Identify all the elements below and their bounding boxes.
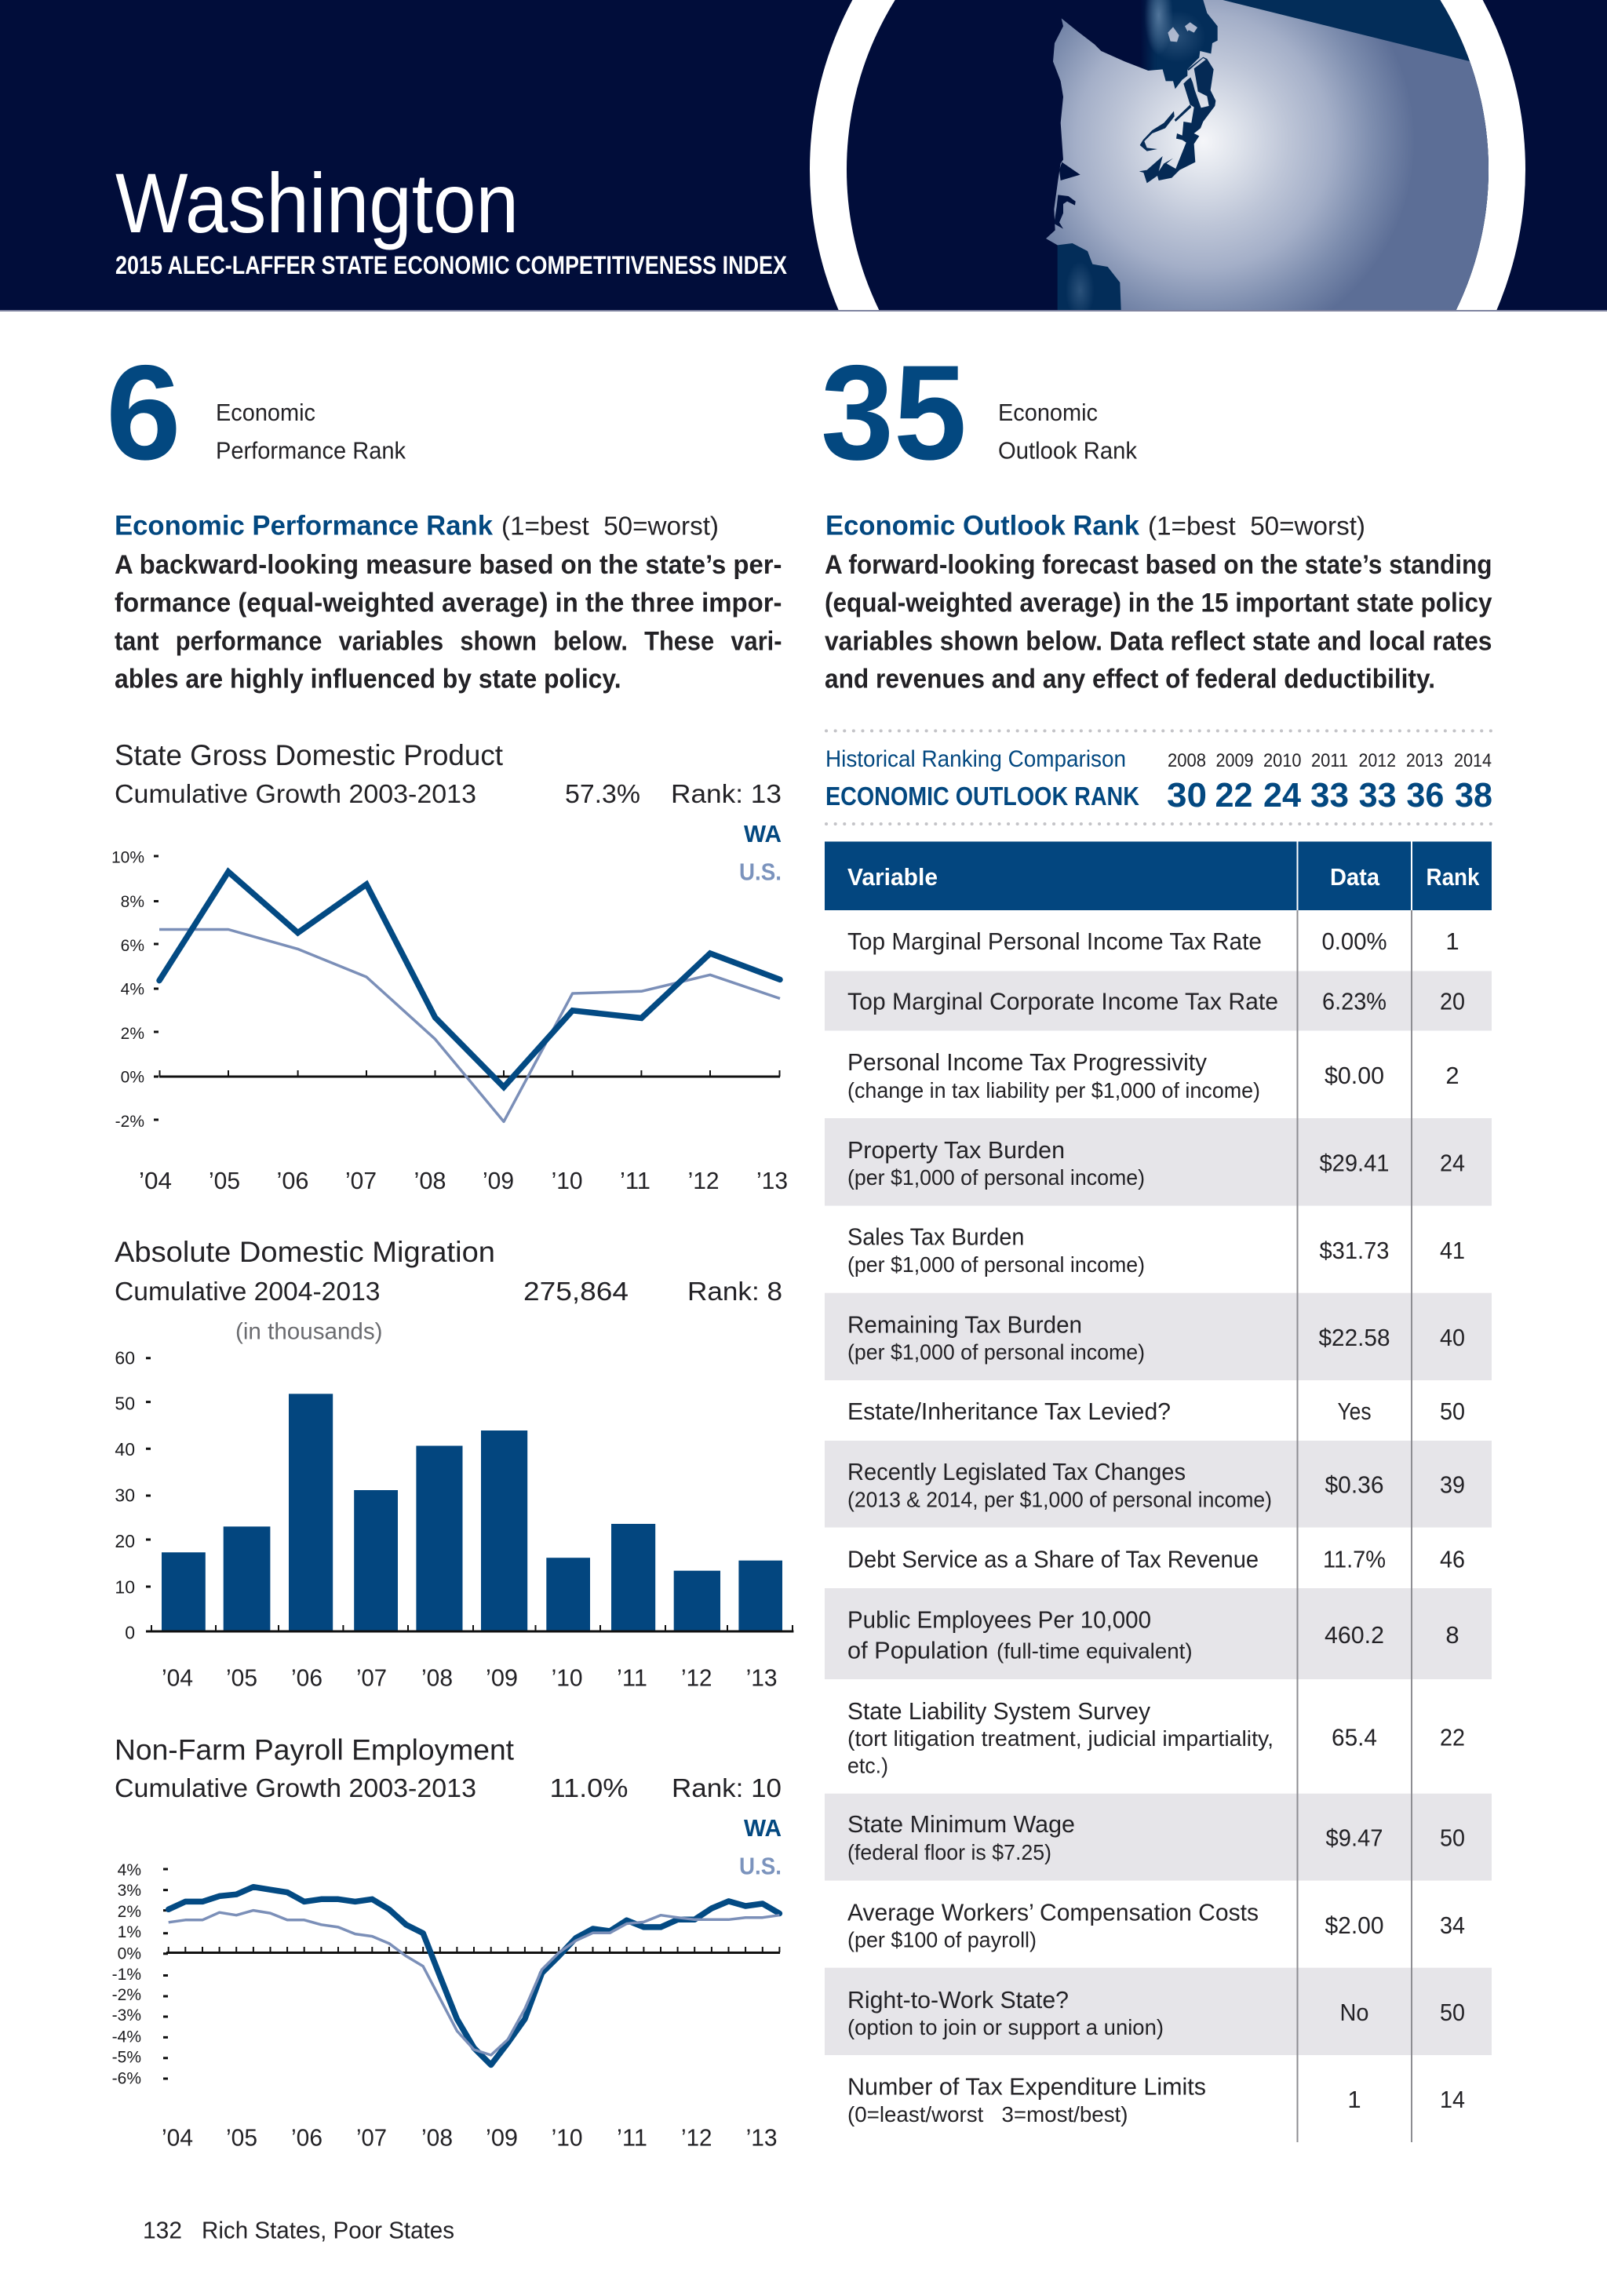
y axis labels: -3% <box>112 2006 141 2024</box>
outlook description: (equal-weighted average) in the 15 important state policy <box>825 588 1492 618</box>
years: 2008 <box>1168 750 1206 771</box>
years: 2014 <box>1454 750 1492 771</box>
y axis labels: 0% <box>118 1944 141 1963</box>
row: sales tax burden <box>825 1206 1492 1293</box>
footer page number: 132 <box>143 2217 182 2244</box>
performance description: tant performance variables shown below. These vari- <box>115 626 782 656</box>
outlook heading: Economic Outlook Rank <box>825 511 1140 541</box>
x axis labels: ’04 <box>162 1664 193 1692</box>
row: top marginal personal income tax rate <box>825 910 1492 971</box>
row: top marginal corporate income tax rate: 6.23% <box>1322 988 1387 1015</box>
row: remaining tax burden: 40 <box>1440 1324 1465 1351</box>
title: Washington <box>115 155 519 250</box>
row: workers compensation <box>825 1881 1492 1968</box>
rank caption: Outlook Rank <box>998 437 1137 465</box>
historical ranks <box>1167 776 1492 815</box>
row: personal income tax progressivity <box>825 1031 1492 1118</box>
row: remaining tax burden: $22.58 <box>1318 1324 1390 1351</box>
row: top marginal personal income tax rate: 0.00% <box>1321 928 1387 955</box>
y axis labels <box>111 849 144 1131</box>
x axis labels <box>139 1167 788 1194</box>
x axis labels <box>162 1664 778 1692</box>
row: recently legislated tax changes: $0.36 <box>1325 1471 1384 1499</box>
outlook heading <box>825 511 1365 541</box>
y axis labels: 40 <box>115 1439 135 1460</box>
row: property tax burden: Property Tax Burden <box>847 1136 1065 1164</box>
row: state minimum wage: State Minimum Wage <box>847 1810 1075 1838</box>
y axis labels: 1% <box>118 1923 141 1941</box>
row: property tax burden: 24 <box>1440 1150 1465 1177</box>
y axis labels: 50 <box>115 1394 135 1414</box>
panel: economic outlook rank <box>821 337 1492 694</box>
row: tax expenditure limits: (0=least/worst 3=most/best) <box>847 2102 1128 2127</box>
row: right-to-work: Right-to-Work State? <box>847 1986 1069 2014</box>
y axis labels <box>115 1347 135 1643</box>
row: personal income tax progressivity: (change in tax liability per $1,000 of income) <box>847 1078 1260 1102</box>
row: top marginal personal income tax rate: Top Marginal Personal Income Tax Rate <box>847 928 1262 955</box>
bars <box>162 1394 782 1631</box>
x axis labels: ’09 <box>486 1664 518 1692</box>
x axis labels: ’08 <box>421 1664 453 1692</box>
header band <box>0 0 1607 312</box>
row: remaining tax burden: (per $1,000 of personal income) <box>847 1339 1145 1364</box>
performance description <box>115 550 782 694</box>
row: personal income tax progressivity: $0.00 <box>1325 1062 1384 1089</box>
y axis labels: 4% <box>121 981 144 998</box>
US line <box>169 1911 779 2055</box>
years: 2009 <box>1216 750 1254 771</box>
x axis labels: ’12 <box>681 1664 712 1692</box>
y axis labels: 6% <box>121 937 144 955</box>
panel: non-farm payroll employment <box>112 1734 782 2152</box>
big number 6: 6 <box>106 337 181 488</box>
years <box>1168 750 1492 771</box>
row: sales tax burden: 41 <box>1440 1237 1465 1264</box>
x axis labels: ’07 <box>345 1167 377 1194</box>
payroll stats <box>115 1773 782 1802</box>
migration stats: Cumulative 2004-2013 <box>115 1277 380 1306</box>
x axis labels: ’06 <box>291 2124 322 2152</box>
line chart: payroll <box>112 1861 780 2152</box>
row: right-to-work: No <box>1340 1999 1368 2026</box>
rank caption: Performance Rank <box>216 437 406 465</box>
row: property tax burden: (per $1,000 of personal income) <box>847 1165 1145 1190</box>
table header: Data <box>1330 863 1380 891</box>
big number 35: 35 <box>821 337 967 488</box>
x axis labels: ’11 <box>617 1664 647 1692</box>
performance heading: Economic Performance Rank <box>115 511 494 541</box>
outlook heading: (1=best 50=worst) <box>1148 512 1365 541</box>
y axis labels: 2% <box>118 1903 141 1921</box>
outlook description: variables shown below. Data reflect state and local rates <box>825 626 1492 656</box>
x axis labels: ’09 <box>483 1167 514 1194</box>
outlook description: and revenues and any effect of federal deductibility. <box>825 665 1435 694</box>
historical ranks: 24 <box>1263 776 1302 815</box>
y axis labels: 10 <box>115 1576 135 1597</box>
historical ranks: 36 <box>1406 776 1444 815</box>
row: top marginal corporate income tax rate: 20 <box>1440 988 1465 1015</box>
row: debt service: 11.7% <box>1323 1545 1386 1573</box>
years: 2011 <box>1311 750 1348 771</box>
x axis labels: ’13 <box>746 2124 778 2152</box>
footer page number: Rich States, Poor States <box>202 2217 454 2244</box>
x axis labels: ’09 <box>486 2124 518 2152</box>
performance heading <box>115 511 719 541</box>
legend: WA <box>744 1814 782 1842</box>
row: top marginal corporate income tax rate: Top Marginal Corporate Income Tax Rate <box>847 988 1278 1015</box>
payroll heading: Non-Farm Payroll Employment <box>115 1734 515 1766</box>
x axis labels: ’10 <box>552 1167 583 1194</box>
payroll stats: Rank: 10 <box>672 1773 782 1802</box>
row: recently legislated tax changes <box>825 1441 1492 1528</box>
migration stats: Rank: 8 <box>687 1277 782 1306</box>
gdp stats: Cumulative Growth 2003-2013 <box>115 779 476 808</box>
row: recently legislated tax changes: 39 <box>1440 1471 1465 1499</box>
legend: WA <box>744 820 782 847</box>
row: sales tax burden: Sales Tax Burden <box>847 1223 1024 1251</box>
panel: historical ranking comparison <box>825 746 1492 815</box>
globe with Washington state map <box>810 0 1525 310</box>
y axis labels: 20 <box>115 1531 135 1551</box>
panel: state gross domestic product <box>111 739 788 1194</box>
row: tax expenditure limits <box>825 2055 1492 2142</box>
row: right-to-work: (option to join or support a union) <box>847 2015 1164 2039</box>
x axis labels: ’05 <box>226 2124 257 2152</box>
comparison label: Historical Ranking Comparison <box>825 746 1126 772</box>
line chart: gdp <box>111 849 788 1194</box>
payroll stats: Cumulative Growth 2003-2013 <box>115 1773 476 1802</box>
gdp heading: State Gross Domestic Product <box>115 739 504 771</box>
years: 2010 <box>1263 750 1301 771</box>
table header <box>825 841 1492 910</box>
row: personal income tax progressivity: Personal Income Tax Progressivity <box>847 1048 1207 1076</box>
row: recently legislated tax changes: Recently Legislated Tax Changes <box>847 1458 1186 1485</box>
historical ranks: 30 <box>1167 776 1207 815</box>
y axis labels <box>112 1861 141 2087</box>
x axis labels <box>162 2124 778 2152</box>
legend <box>739 820 782 885</box>
row: state liability system survey: (tort litigation treatment, judicial impartiality, <box>847 1726 1274 1751</box>
US line <box>159 929 780 1121</box>
panel: economic performance rank <box>106 337 782 694</box>
row: estate/inheritance tax: Yes <box>1337 1398 1372 1425</box>
gdp stats: Rank: 13 <box>671 779 782 808</box>
x axis labels: ’11 <box>617 2124 647 2152</box>
table header: Rank <box>1427 863 1480 891</box>
row: sales tax burden: $31.73 <box>1320 1237 1389 1264</box>
historical ranks: 33 <box>1359 776 1397 815</box>
outlook description: A forward-looking forecast based on the state’s standing <box>825 550 1492 580</box>
row: estate/inheritance tax: 50 <box>1440 1398 1465 1425</box>
row: tax expenditure limits: 1 <box>1347 2086 1361 2113</box>
row: personal income tax progressivity: 2 <box>1445 1062 1459 1089</box>
y axis labels: 2% <box>121 1025 144 1043</box>
rank caption: Economic <box>216 399 315 426</box>
gdp stats: 57.3% <box>565 779 640 808</box>
row: state liability system survey: State Liability System Survey <box>847 1697 1150 1725</box>
bar chart: migration <box>115 1347 793 1692</box>
performance heading: (1=best 50=worst) <box>501 512 719 541</box>
row: public employees: 8 <box>1445 1621 1459 1649</box>
table: policy variables <box>825 841 1492 2142</box>
y axis labels: 4% <box>118 1861 141 1879</box>
y axis labels: -1% <box>112 1966 141 1984</box>
gdp stats <box>115 779 782 808</box>
row: state liability system survey <box>825 1679 1492 1794</box>
y axis labels: -2% <box>115 1113 144 1131</box>
row: state minimum wage: (federal floor is $7.25) <box>847 1840 1051 1864</box>
x axis labels: ’06 <box>291 1664 322 1692</box>
x axis labels: ’07 <box>356 1664 387 1692</box>
row: debt service: Debt Service as a Share of Tax Revenue <box>847 1545 1259 1573</box>
y axis labels: -4% <box>112 2028 141 2046</box>
x axis labels: ’13 <box>756 1167 788 1194</box>
payroll stats: 11.0% <box>549 1773 628 1802</box>
row: debt service <box>825 1528 1492 1588</box>
migration heading: Absolute Domestic Migration <box>115 1236 495 1268</box>
row: state liability system survey: 22 <box>1440 1723 1465 1751</box>
row: top marginal personal income tax rate: 1 <box>1445 928 1459 955</box>
row: public employees <box>825 1588 1492 1679</box>
outlook description <box>825 550 1492 694</box>
row: workers compensation: Average Workers’ Compensation Costs <box>847 1899 1259 1926</box>
y axis labels: -2% <box>112 1986 141 2004</box>
row: public employees: 460.2 <box>1325 1621 1384 1649</box>
x axis labels: ’13 <box>746 1664 778 1692</box>
row: public employees: (full-time equivalent) <box>997 1638 1193 1663</box>
y axis labels: -5% <box>112 2049 141 2067</box>
row: debt service: 46 <box>1440 1545 1465 1573</box>
row: top marginal corporate income tax rate <box>825 971 1492 1031</box>
x axis labels: ’08 <box>421 2124 453 2152</box>
WA line <box>159 872 780 1087</box>
migration stats <box>115 1277 782 1306</box>
x axis labels: ’12 <box>688 1167 720 1194</box>
row: estate/inheritance tax: Estate/Inheritance Tax Levied? <box>847 1398 1171 1425</box>
row: state minimum wage: 50 <box>1440 1824 1465 1852</box>
table header: Variable <box>847 863 938 891</box>
performance description: A backward-looking measure based on the state’s per- <box>115 550 782 580</box>
x axis labels: ’07 <box>356 2124 387 2152</box>
unit note: (in thousands) <box>235 1319 383 1345</box>
row: tax expenditure limits: Number of Tax Expenditure Limits <box>847 2072 1206 2100</box>
legend <box>739 1814 782 1880</box>
x axis labels: ’08 <box>414 1167 446 1194</box>
legend: U.S. <box>739 1853 782 1880</box>
row: remaining tax burden <box>825 1293 1492 1380</box>
row: state liability system survey: 65.4 <box>1332 1723 1377 1751</box>
x axis labels: ’05 <box>209 1167 240 1194</box>
rank caption <box>998 399 1137 465</box>
y axis labels: 60 <box>115 1347 135 1368</box>
row: right-to-work: 50 <box>1440 1999 1465 2026</box>
y axis labels: 0% <box>121 1069 144 1087</box>
row: estate/inheritance tax <box>825 1380 1492 1441</box>
y axis labels: 30 <box>115 1485 135 1506</box>
subtitle: 2015 ALEC-LAFFER STATE ECONOMIC COMPETITIVENESS INDEX <box>115 251 788 279</box>
row: workers compensation: $2.00 <box>1325 1912 1384 1939</box>
legend: U.S. <box>739 858 782 885</box>
row: remaining tax burden: Remaining Tax Burden <box>847 1310 1082 1338</box>
y axis labels: -6% <box>112 2070 141 2087</box>
row: workers compensation: 34 <box>1440 1912 1465 1939</box>
row: public employees: Public Employees Per 10,000 <box>847 1605 1151 1633</box>
row: property tax burden: $29.41 <box>1320 1150 1389 1177</box>
x axis labels: ’05 <box>226 1664 257 1692</box>
historical ranks: 38 <box>1455 776 1492 815</box>
row: state liability system survey: etc.) <box>847 1753 888 1777</box>
performance description: ables are highly influenced by state policy. <box>115 665 621 694</box>
outlook rank label: ECONOMIC OUTLOOK RANK <box>825 782 1139 811</box>
historical ranks: 33 <box>1310 776 1349 815</box>
y axis labels: 10% <box>111 849 144 866</box>
row: sales tax burden: (per $1,000 of personal income) <box>847 1252 1145 1277</box>
WA line <box>169 1887 779 2065</box>
row: right-to-work <box>825 1968 1492 2055</box>
x axis labels: ’04 <box>139 1167 172 1194</box>
row: public employees: of Population <box>847 1636 989 1664</box>
migration stats: 275,864 <box>523 1277 629 1306</box>
y axis labels: 3% <box>118 1882 141 1900</box>
x axis labels: ’04 <box>162 2124 193 2152</box>
x axis labels: ’12 <box>681 2124 712 2152</box>
x axis labels: ’06 <box>276 1167 309 1194</box>
row: state minimum wage: $9.47 <box>1326 1824 1383 1852</box>
row: state minimum wage <box>825 1794 1492 1881</box>
historical ranks: 22 <box>1215 776 1252 815</box>
y axis labels: 0 <box>125 1623 135 1643</box>
y axis labels: 8% <box>121 893 144 911</box>
row: recently legislated tax changes: (2013 & 2014, per $1,000 of personal income) <box>847 1488 1272 1512</box>
years: 2013 <box>1406 750 1443 771</box>
rank caption: Economic <box>998 399 1098 426</box>
x axis labels: ’10 <box>552 2124 583 2152</box>
row: property tax burden <box>825 1118 1492 1206</box>
row: tax expenditure limits: 14 <box>1440 2086 1465 2113</box>
panel: absolute domestic migration <box>115 1236 793 1692</box>
performance description: formance (equal-weighted average) in the three impor- <box>115 588 782 618</box>
rank caption <box>216 399 406 465</box>
years: 2012 <box>1359 750 1396 771</box>
x axis labels: ’11 <box>620 1167 650 1194</box>
x axis labels: ’10 <box>552 1664 583 1692</box>
row: workers compensation: (per $100 of payroll) <box>847 1928 1037 1952</box>
